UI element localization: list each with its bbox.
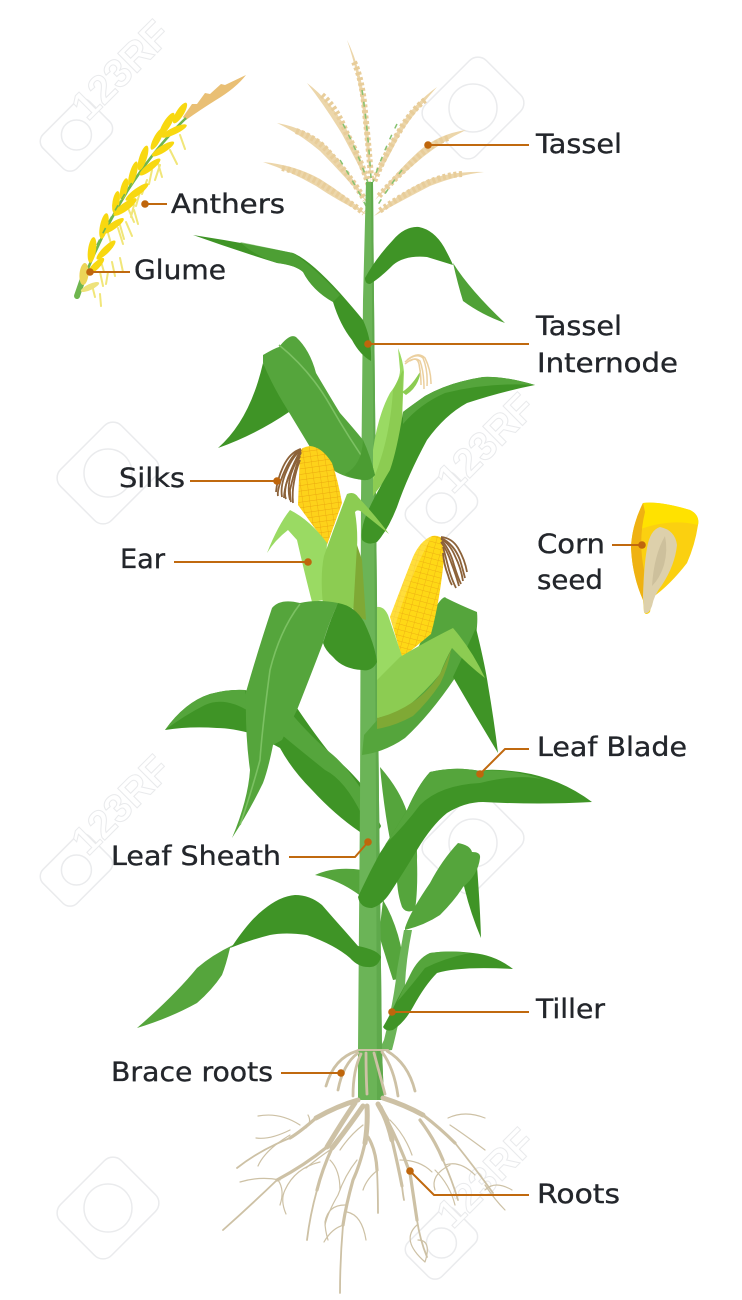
spike stem highlights xyxy=(97,178,135,245)
corn seed xyxy=(631,503,698,614)
leaf: small left stub xyxy=(315,869,362,897)
leaf: upper right xyxy=(362,377,535,544)
husk front xyxy=(377,628,485,718)
silks xyxy=(276,449,301,503)
tassel green axes xyxy=(340,90,402,208)
husk, inner xyxy=(322,493,389,610)
husk, outer xyxy=(267,510,327,602)
thick roots xyxy=(316,1098,423,1148)
leaf: small behind stalk xyxy=(380,767,417,911)
ear of corn, left xyxy=(267,446,389,620)
leaf: big folded, left xyxy=(232,601,377,838)
label: Tiller: Tiller xyxy=(535,994,606,1025)
tassel spikelet texture xyxy=(282,62,462,213)
label: Leaf Blade: Leaf Blade xyxy=(537,732,687,763)
leaf: lower tiller xyxy=(383,952,513,1031)
leaf highlight: lower left xyxy=(165,690,250,730)
leaf: lower left, behind xyxy=(165,690,381,833)
tassel branches xyxy=(263,40,484,216)
leader lines and dots xyxy=(86,141,646,1195)
label: Tassel Internode: Internode xyxy=(537,348,678,379)
husk left xyxy=(377,607,403,690)
label: Tassel Internode xyxy=(535,311,678,379)
husk shade xyxy=(377,650,451,729)
medium roots xyxy=(277,1115,455,1225)
fine roots xyxy=(223,1138,493,1293)
upper ear silks xyxy=(405,355,431,389)
ear of corn, right xyxy=(362,536,498,755)
thin roots xyxy=(240,1114,512,1262)
label: Tassel Internode: Tassel xyxy=(535,311,622,342)
upper ear with silks xyxy=(373,348,431,496)
leaf behind the right ear xyxy=(362,597,477,755)
anthers xyxy=(92,135,185,306)
panel: anther spike detail xyxy=(77,75,246,306)
roots xyxy=(223,1098,512,1293)
leaf: behind tiller xyxy=(379,900,404,980)
tassel xyxy=(263,40,484,216)
watermarks: 123RF xyxy=(428,385,544,501)
label: Ear: Ear xyxy=(120,544,166,575)
watermarks xyxy=(36,12,544,1283)
label: Anthers: Anthers xyxy=(171,189,285,220)
leaf: big lower right xyxy=(358,769,592,908)
label: Brace roots: Brace roots xyxy=(111,1057,273,1088)
label: Leaf Sheath: Leaf Sheath xyxy=(111,841,281,872)
label: Corn seed xyxy=(537,529,605,596)
leaf: upper left large xyxy=(218,336,375,480)
watermarks: 123RF xyxy=(428,1120,544,1236)
label: Corn seed: Corn xyxy=(537,529,605,560)
label: Silks: Silks xyxy=(119,463,185,494)
tiller stem xyxy=(378,930,412,1052)
leaves behind the stalk xyxy=(165,690,417,1052)
spike stem xyxy=(77,118,186,296)
watermarks: 123RF xyxy=(63,12,179,128)
spike tan tip xyxy=(183,75,246,120)
stalk xyxy=(358,182,384,1100)
label: Roots: Roots xyxy=(537,1179,620,1210)
label: Glume: Glume xyxy=(134,255,226,286)
glumes xyxy=(79,101,190,294)
cob xyxy=(390,536,444,658)
label: Corn seed: seed xyxy=(537,565,603,596)
leaf: top left xyxy=(193,235,371,361)
leaf: lower left xyxy=(137,895,381,1028)
cob xyxy=(298,446,342,545)
leaf: upper tiller xyxy=(405,843,481,938)
silks xyxy=(441,537,467,588)
husk shade xyxy=(353,545,366,620)
leaf: top right xyxy=(365,227,505,323)
watermarks: 123RF xyxy=(63,747,179,863)
brace roots xyxy=(326,1050,415,1096)
label: Tassel: Tassel xyxy=(535,129,622,160)
